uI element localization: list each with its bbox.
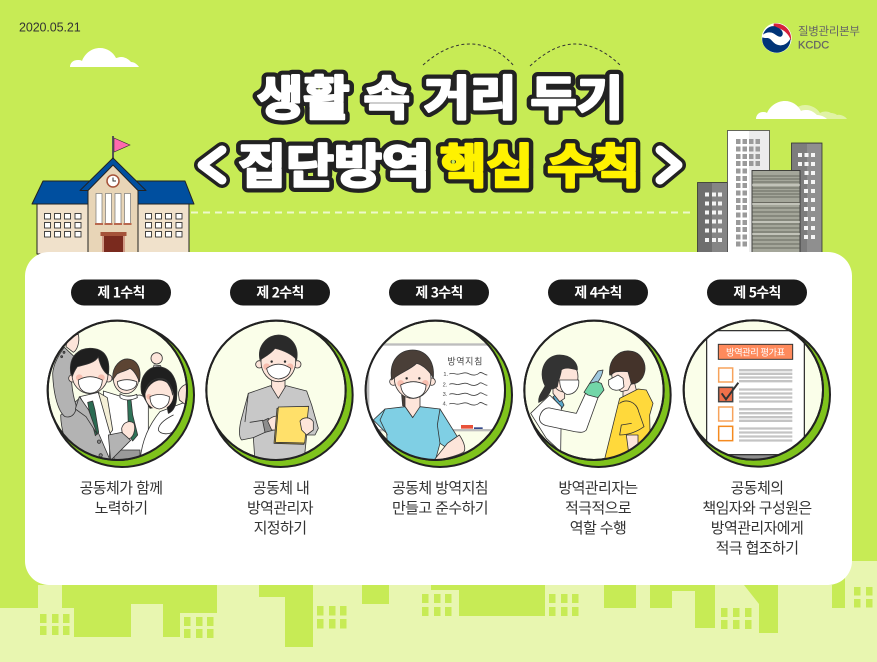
caption: rule 2: 공동체 내 (253, 477, 309, 498)
caption: rule 5 (702, 477, 812, 558)
pill: rule 1 (71, 280, 171, 306)
caption: rule 2: 방역관리자 (247, 497, 314, 518)
illustration: school (32, 136, 194, 254)
caption: rule 5: 공동체의 (731, 477, 783, 498)
title line 1: 생활 속 거리 두기 (257, 60, 623, 129)
dashed arcs above title (423, 44, 621, 66)
title line 2: 핵심 수칙 (440, 128, 640, 197)
pill: rule 4 (548, 280, 648, 306)
caption: rule 3: 만들고 준수하기 (392, 497, 488, 518)
caption: rule 4 (558, 477, 638, 538)
logo: KCDC (762, 23, 860, 53)
logo: KCDC: 질병관리본부 (798, 23, 860, 39)
illustration: rule 3 guidelines on whiteboard: 2. (443, 382, 448, 388)
illustration: rule 5 evaluation checklist (684, 320, 830, 467)
icon: clouds right (756, 101, 847, 119)
illustration: rule 3 guidelines on whiteboard: 3. (443, 392, 448, 398)
caption: rule 4: 역할 수행 (570, 517, 626, 538)
caption: rule 5: 책임자와 구성원은 (702, 497, 812, 518)
skyline: bottom background (0, 561, 877, 662)
caption: rule 2: 지정하기 (254, 517, 306, 538)
pill: rule 2: 제 2수칙 (256, 282, 304, 302)
title line 2: 핵심 수칙 (440, 128, 640, 197)
caption: rule 5: 적극 협조하기 (716, 537, 798, 558)
illustration: rule 5 evaluation checklist: 방역관리 평가표 (726, 344, 786, 358)
illustration: rule 3 guidelines on whiteboard: 1. (443, 372, 448, 378)
panel: white card (25, 252, 852, 585)
caption: rule 3: 공동체 방역지침 (392, 477, 488, 498)
illustration: rule 4 temperature check (524, 321, 671, 467)
illustration: rule 3 guidelines on whiteboard: 방역지침 (447, 354, 482, 367)
logo: KCDC: KCDC (798, 40, 829, 52)
pill: rule 3: 제 3수칙 (415, 282, 463, 302)
title line 2: 집단방역 (238, 128, 430, 197)
illustration: rule 3 guidelines on whiteboard (360, 321, 520, 467)
illustration: rule 2 designated manager (206, 321, 353, 467)
caption: rule 1 (80, 477, 162, 518)
caption: rule 1: 노력하기 (95, 497, 147, 518)
pill: rule 2 (230, 280, 330, 306)
title line 1: 생활 속 거리 두기 (257, 60, 623, 129)
illustration: city buildings (698, 130, 822, 255)
pill: rule 1: 제 1수칙 (97, 282, 145, 302)
title line 2: 집단방역 (238, 128, 430, 197)
pill: rule 3 (389, 280, 489, 306)
pill: rule 5: 제 5수칙 (733, 282, 781, 302)
illustration: rule 1 people together (48, 321, 197, 467)
caption: rule 1: 공동체가 함께 (80, 477, 162, 498)
caption: rule 5: 방역관리자에게 (711, 517, 803, 538)
icon: cloud left (70, 48, 139, 67)
pill: rule 5 (707, 280, 807, 306)
chevrons (202, 150, 678, 180)
caption: rule 2 (247, 477, 314, 538)
caption: rule 4: 적극적으로 (565, 497, 632, 518)
caption: rule 3 (392, 477, 488, 518)
date: 2020.05.21 (19, 20, 81, 34)
illustration: rule 3 guidelines on whiteboard: 4. (443, 402, 448, 408)
caption: rule 4: 방역관리자는 (558, 477, 638, 498)
dashed line: school to city (191, 212, 693, 214)
pill: rule 4: 제 4수칙 (574, 282, 622, 302)
title line 2 (238, 128, 640, 197)
